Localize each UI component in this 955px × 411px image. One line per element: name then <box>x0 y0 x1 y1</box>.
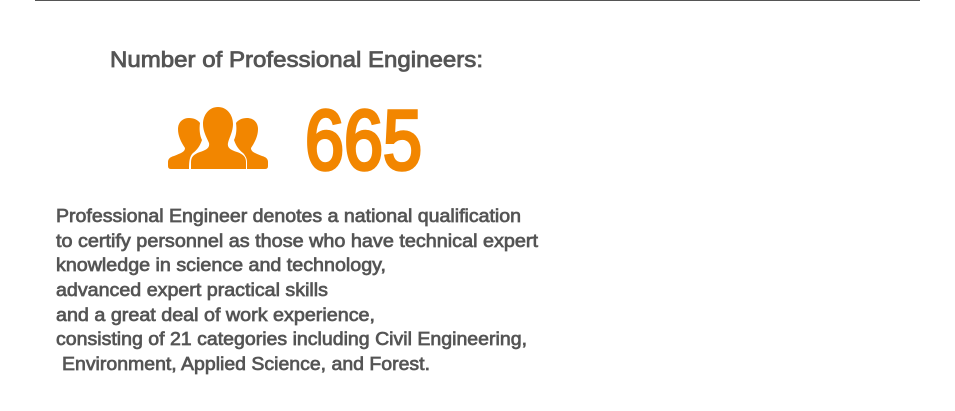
description text block: knowledge in science and technology, <box>56 255 386 275</box>
heading: Number of Professional Engineers: <box>110 47 483 72</box>
description text block: Professional Engineer denotes a national qualification <box>56 206 521 226</box>
number: 665: 665 <box>305 93 422 187</box>
description text block: advanced expert practical skills <box>56 280 328 300</box>
description text block: consisting of 21 categories including Civil Engineering, <box>56 329 527 349</box>
description text block <box>56 206 538 374</box>
description text block: and a great deal of work experience, <box>56 305 375 325</box>
description text block: to certify personnel as those who have technical expert <box>56 231 538 251</box>
description text block: Environment, Applied Science, and Forest. <box>62 354 430 374</box>
icon: group of people <box>168 107 268 169</box>
